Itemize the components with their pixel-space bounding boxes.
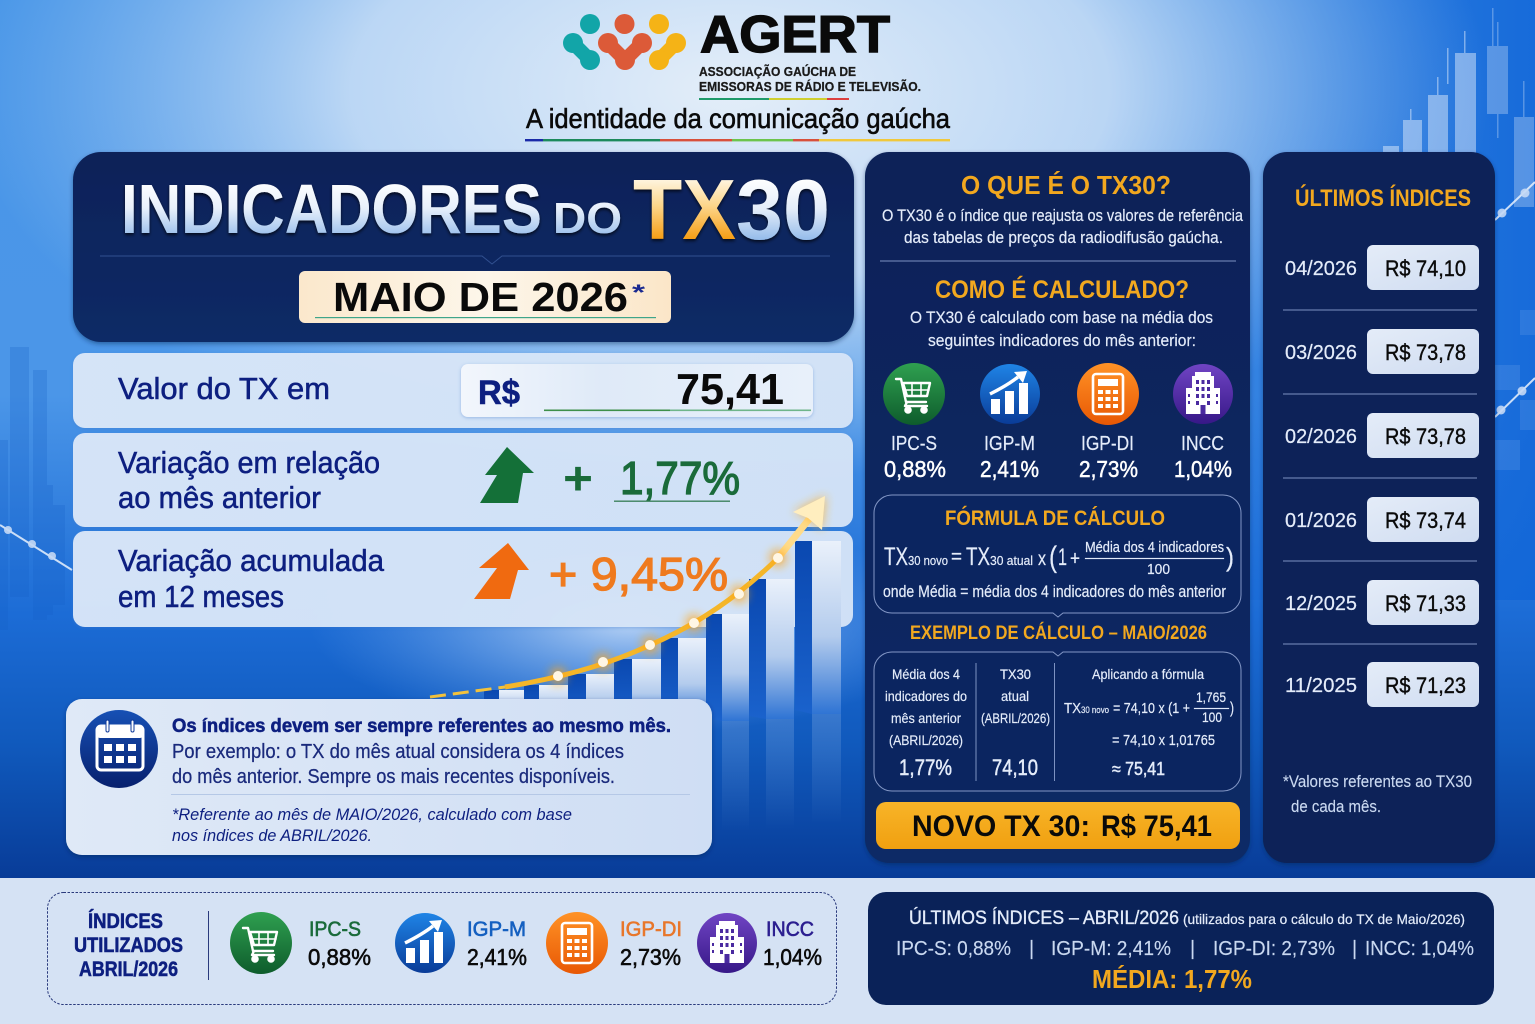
heading: indices used: ÍNDICES [88,910,163,933]
panel: note [66,699,712,855]
text: latest indexes note: de cada mês. [1291,797,1381,816]
item: IPC-S [230,912,371,974]
decorative trend lines [0,182,1535,570]
heading: how calculated: COMO É CALCULADO? [935,275,1189,304]
value: monthly variation: 1,77% [620,452,740,504]
column: media: 1,77% [899,755,952,780]
row: Valor do TX [73,353,853,428]
panel: latest indexes [1263,152,1495,863]
column: TX30 atual [981,666,1050,780]
item: INCC: INCC [766,918,814,941]
heading: Indicadores do TX30: TX [633,163,736,258]
column: media [885,666,967,780]
chart: rising bars with curve [430,495,841,831]
arrow: up orange [474,543,529,599]
row: 12/2025: 12/2025 [1285,593,1357,615]
item: IPC-S: IPC-S [309,918,361,941]
result button [876,802,1240,849]
indicator: IPC-S [883,363,946,482]
box: formula: TX [966,543,990,571]
box: formula: ( [1049,541,1057,574]
text: index values: | [1190,938,1195,960]
panel: center explanation [865,152,1250,863]
value box: 75,41 [676,365,784,414]
logo: AGERT: EMISSORAS DE RÁDIO E TELEVISÃO. [699,79,921,94]
text: note body [172,716,671,788]
text: note body: Os índices devem ser sempre referentes ao mesmo mês. [172,716,671,737]
text: note body: do mês anterior. Sempre os mais recentes disponíveis. [172,766,615,788]
text: footnote: *Referente ao mês de MAIO/2026, calculado com base [172,805,572,824]
heading: summary [909,907,1465,929]
indicator: IGP-DI: IGP-DI [1081,433,1134,455]
row: 02/2026 [1285,413,1479,458]
row: 01/2026 [1285,497,1479,542]
badge: month: MAIO DE 2026 [333,274,628,320]
value box: R$ [478,374,520,412]
logo: AGERT: AGERT [700,6,890,64]
footer band [0,878,1535,1024]
column: applying formula: = 74,10 x (1 + [1113,700,1190,717]
text: index values: IGP-M: 2,41% [1051,938,1171,960]
row: 11/2025: 11/2025 [1285,675,1357,697]
indicator: IGP-DI [1077,363,1139,482]
text: latest indexes note: *Valores referentes ao TX30 [1283,772,1472,791]
value box [461,364,813,417]
panel: April indices summary [868,892,1494,1005]
row: 01/2026: 01/2026 [1285,510,1357,532]
text: latest indexes note [1283,772,1472,816]
item: INCC [697,913,822,973]
heading: indices used: ABRIL/2026 [79,958,178,981]
row: variação acumulada: em 12 meses [118,579,284,614]
decorative candlestick chart [1383,8,1534,207]
text: definition: das tabelas de preços da radiodifusão gaúcha. [904,228,1223,247]
row: 01/2026: R$ 73,74 [1385,508,1466,533]
badge: month: * [632,280,646,305]
box: formula: 1 [1058,544,1067,571]
indicator: IGP-M [980,364,1040,482]
text: calculation basis: O TX30 é calculado com base na média dos [910,308,1213,327]
badge: month [299,271,671,323]
box: formula: Média dos 4 indicadores [1085,540,1224,556]
box: formula: + [1070,548,1080,570]
text: footnote [172,805,572,845]
column: applying formula: 30 novo [1081,705,1109,715]
value: accumulated variation: + 9,45% [549,548,728,600]
indicator: IGP-DI: 2,73% [1079,456,1138,482]
item: IGP-DI: 2,73% [620,944,681,970]
box: formula: ) [1226,542,1234,572]
row: 12/2025: R$ 71,33 [1385,591,1466,616]
row: variação acumulada: Variação acumulada [118,543,385,578]
text: calculation basis [910,308,1213,350]
result button: R$ 75,41 [1101,810,1212,843]
text: definition: O TX30 é o índice que reajusta os valores de referência [882,206,1243,225]
column: applying formula: ) [1230,700,1234,717]
row: variação mensal: Variação em relação [118,445,380,480]
box: formula [874,495,1241,617]
column: applying formula: 1,765 [1196,689,1226,705]
column: TX30 atual: 74,10 [992,755,1038,780]
box: formula: TX [884,543,908,571]
row: 03/2026 [1285,329,1479,374]
row: variação acumulada [73,531,853,627]
box: formula: FÓRMULA DE CÁLCULO [945,506,1165,530]
box: formula: 30 atual [990,553,1033,568]
logo: AGERT [563,6,921,100]
row: 04/2026 [1285,245,1479,290]
column: media: indicadores do [885,688,967,704]
tagline: A identidade da comunicação gaúcha [526,103,950,134]
row: 04/2026: R$ 74,10 [1385,256,1466,281]
indicator: IPC-S: IPC-S [891,433,937,455]
column: applying formula [1064,666,1234,779]
row: 02/2026: R$ 73,78 [1385,424,1466,449]
column: media: Média dos 4 [892,666,960,682]
logo: AGERT: ASSOCIAÇÃO GAÚCHA DE [699,64,856,79]
heading: indices used: UTILIZADOS [74,934,183,957]
row: variação mensal [73,433,853,527]
heading: example: EXEMPLO DE CÁLCULO – MAIO/2026 [910,622,1207,644]
text: calculation basis: seguintes indicadores do mês anterior: [928,331,1196,350]
heading: Indicadores do TX30: 30 [736,163,830,258]
row: 03/2026: R$ 73,78 [1385,340,1466,365]
indicator: IPC-S: 0,88% [884,456,946,482]
text: footnote: nos índices de ABRIL/2026. [172,826,372,845]
column: TX30 atual: TX30 [1000,666,1031,682]
box: formula: x [1038,549,1046,570]
indicator: IGP-M: 2,41% [980,456,1039,482]
text: index values: | [1352,938,1357,960]
column: applying formula: = 74,10 x 1,01765 [1112,732,1215,749]
row: 11/2025: R$ 71,23 [1385,673,1466,698]
row: variação mensal: ao mês anterior [118,480,321,515]
value: monthly variation [563,452,740,504]
text: index values [896,938,1474,960]
column: applying formula: ≈ 75,41 [1112,759,1165,779]
column: applying formula: Aplicando a fórmula [1092,666,1204,682]
item: IGP-M: 2,41% [467,944,527,970]
column: media: (ABRIL/2026) [889,732,963,748]
heading: indices used [74,910,183,981]
column: applying formula: TX [1064,700,1081,717]
heading: latest indexes: ÚLTIMOS ÍNDICES [1295,184,1471,212]
item: IPC-S: 0,88% [308,944,371,970]
heading: Indicadores do TX30: INDICADORES [121,170,542,248]
column: TX30 atual: (ABRIL/2026) [981,710,1050,726]
heading: summary: (utilizados para o cálculo do TX de Maio/2026) [1183,911,1465,927]
row: Valor do TX: Valor do TX em [118,371,330,406]
heading: summary: ÚLTIMOS ÍNDICES – ABRIL/2026 [909,907,1179,929]
heading: Indicadores do TX30: DO [553,194,622,243]
text: index values: INCC: 1,04% [1365,938,1474,960]
item: IGP-DI [546,912,682,974]
indicator: IGP-M: IGP-M [984,433,1035,455]
heading: Indicadores do TX30 [121,163,830,258]
text: definition [882,206,1243,247]
text: index values: IPC-S: 0,88% [896,938,1011,960]
indicator: INCC [1173,364,1233,482]
row: 11/2025 [1285,662,1479,707]
indicator: INCC: INCC [1181,433,1224,455]
box: formula: onde Média = média dos 4 indicadores do mês anterior [883,582,1226,601]
item: IGP-M: IGP-M [467,918,526,941]
column: media: mês anterior [891,710,961,726]
item: IGP-M [395,913,527,973]
box: example calculation [874,652,1241,791]
panel: indices used [48,892,836,1004]
text: index values: | [1029,938,1034,960]
arrow: up green [480,447,534,503]
item: INCC: 1,04% [763,944,822,970]
column: TX30 atual: atual [1001,688,1029,704]
row: 03/2026: 03/2026 [1285,342,1357,364]
value: monthly variation: + [563,452,593,504]
row: 02/2026: 02/2026 [1285,426,1357,448]
box: formula: 30 novo [908,553,948,568]
text: average: MÉDIA: 1,77% [1092,964,1252,994]
box: formula: 100 [1147,562,1170,578]
result button: NOVO TX 30: [912,810,1090,843]
row: 04/2026: 04/2026 [1285,258,1357,280]
panel: title [73,152,854,342]
text: note body: Por exemplo: o TX do mês atual considera os 4 índices [172,741,624,763]
heading: what is TX30: O QUE É O TX30? [961,170,1171,200]
row: 12/2025 [1285,580,1479,625]
icon: calendar [80,710,158,788]
indicator: INCC: 1,04% [1174,456,1232,482]
text: index values: IGP-DI: 2,73% [1213,938,1335,960]
box: formula: = [951,546,962,568]
column: applying formula: 100 [1202,709,1222,725]
item: IGP-DI: IGP-DI [620,918,682,941]
